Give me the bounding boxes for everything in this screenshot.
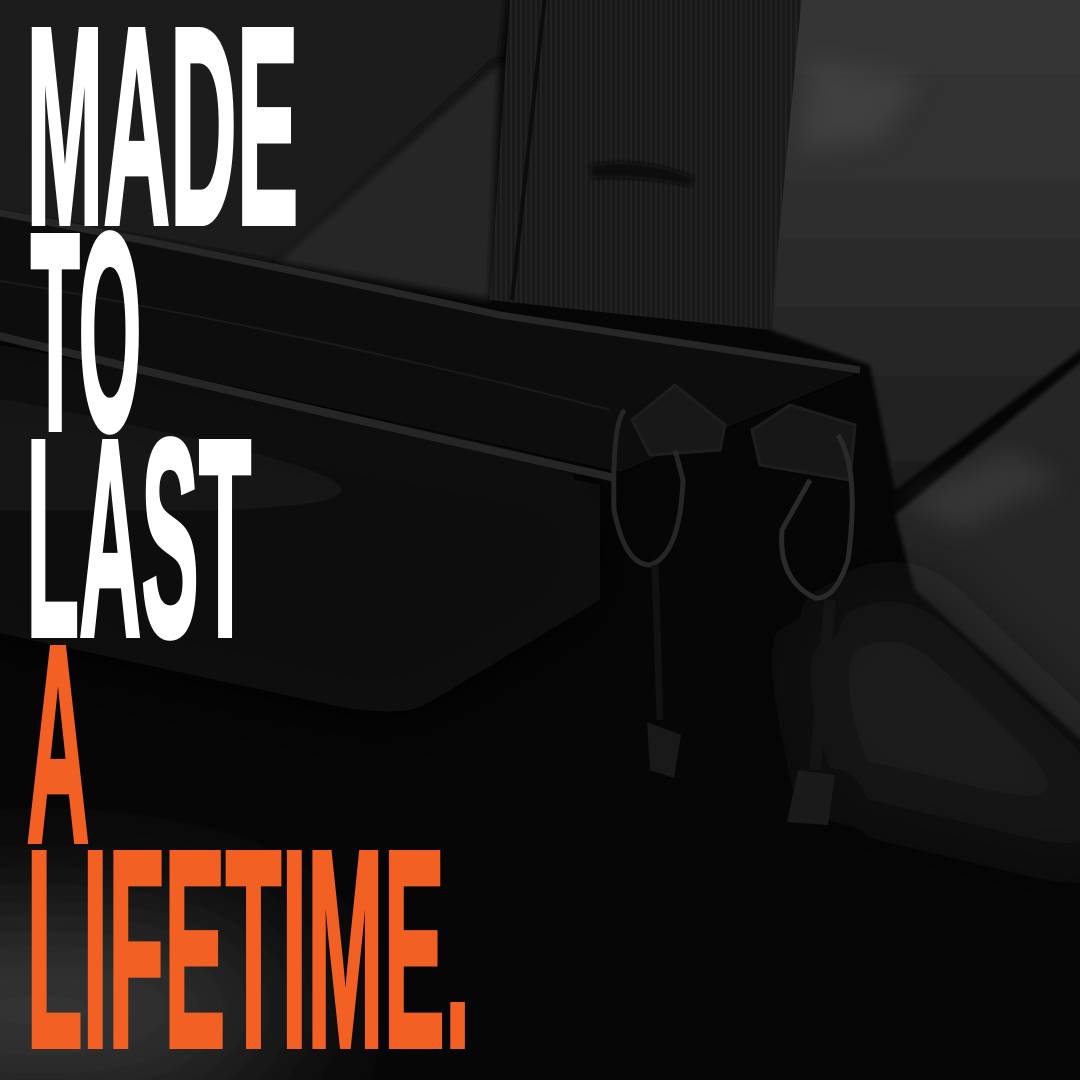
title: LAST — [26, 380, 251, 696]
photo: webbing strap — [490, 0, 802, 330]
photo: zipper seams — [0, 212, 860, 478]
icon: zipper pull left — [614, 385, 725, 778]
photo: quilted panel on the right — [770, 0, 1080, 860]
title: TO — [30, 174, 142, 490]
title — [26, 0, 470, 1080]
title: A — [26, 586, 90, 902]
icon: zipper pull right — [752, 405, 855, 825]
background: lower left grey glow — [0, 920, 300, 1080]
